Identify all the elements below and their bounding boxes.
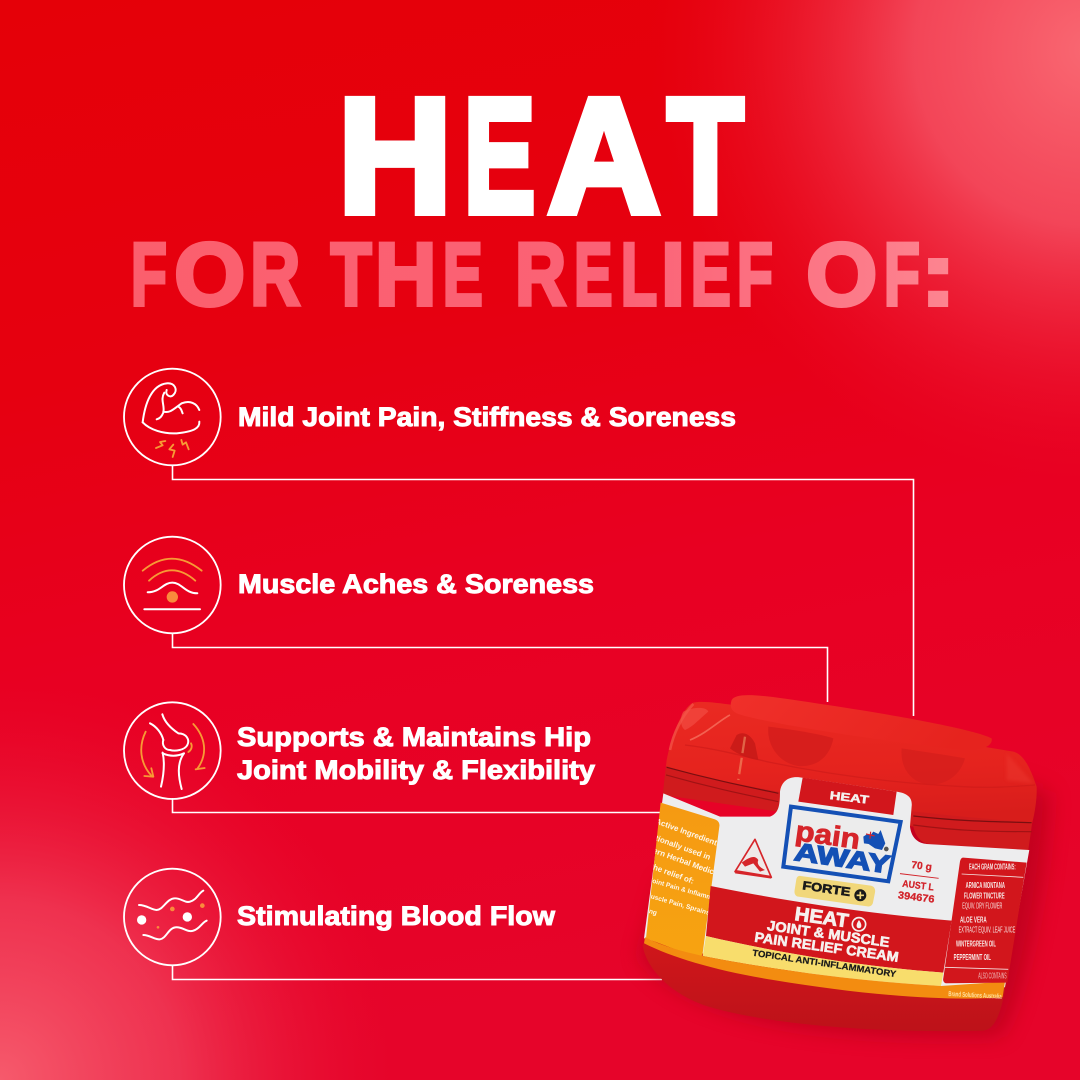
orange side panel: ing (646, 908, 658, 917)
subtitle: for the relief of: T (331, 224, 372, 324)
weight and licence text: 70 g (911, 860, 932, 873)
icon: blood flow (124, 869, 221, 965)
subtitle: for the relief of: O (806, 224, 877, 324)
orange side panel: itionally used in (652, 833, 712, 862)
product: Pain Away jar (640, 695, 1050, 1037)
subtitle: for the relief of: H (375, 224, 436, 324)
ingredients panel: WINTERGREEN OIL (956, 939, 996, 949)
red product band: PAIN RELIEF CREAM (754, 929, 900, 965)
ingredients panel: ALSO CONTAINS (978, 970, 1007, 980)
white label (644, 777, 1029, 988)
lid top disc (731, 695, 992, 750)
red product band: JOINT & MUSCLE (766, 917, 891, 950)
jar lid (666, 702, 1037, 823)
lid ring line (667, 767, 1032, 823)
title: HEAT: A (548, 64, 660, 247)
subtitle: for the relief of: L (621, 224, 657, 324)
title: HEAT: E (464, 64, 535, 247)
connector lines (172, 465, 914, 980)
under-lid ring (663, 765, 1033, 850)
subtitle: for the relief of: R (515, 224, 566, 324)
orange lower band: Brand Solutions Australia (948, 991, 1002, 1001)
Forte badge (794, 876, 875, 906)
kangaroo triangle mark (735, 839, 771, 879)
weight and licence text: AUST L (902, 879, 934, 893)
Pain Away logo: pain (793, 815, 862, 855)
Forte badge: FORTE (802, 878, 851, 899)
orange lower band (644, 937, 1005, 1001)
label: hip joint mobility: Joint Mobility & Flexibility (237, 755, 595, 785)
label: joint pain: Mild Joint Pain, Stiffness & Soreness (238, 402, 736, 432)
red product band (706, 886, 952, 973)
orange side panel: Joint Pain & Inflammation (648, 877, 728, 906)
jar shadow (640, 780, 1050, 1037)
subtitle: for the relief of: O (174, 224, 245, 324)
title: HEAT: H (338, 64, 452, 247)
ingredients panel: ALOE VERA (960, 915, 987, 925)
icon: heat waves (124, 537, 221, 633)
ingredients panel: FLOWER TINCTURE (964, 891, 1005, 901)
orange side panel: the relief of: (649, 862, 695, 886)
lid dimples (730, 727, 965, 784)
subtitle: for the relief of: I (661, 224, 685, 324)
ingredients panel: PEPPERMINT OIL (954, 952, 991, 962)
HEAT tab (798, 778, 897, 815)
yellow anti-inflammatory band (703, 936, 943, 986)
Pain Away logo (783, 807, 901, 881)
ingredients panel: EACH GRAM CONTAINS: (969, 861, 1016, 871)
lid shoulder step and highlights (670, 704, 1035, 787)
subtitle: for the relief of: E (574, 224, 612, 324)
ingredients panel: ARNICA MONTANA (966, 880, 1005, 890)
orange side panel: tern Herbal Medicine (649, 845, 727, 881)
icon: hip joint (124, 702, 221, 799)
ingredients panel (943, 858, 1027, 983)
red product band: HEAT (793, 904, 850, 932)
subtitle: for the relief of: E (443, 224, 483, 324)
HEAT tab: HEAT (829, 790, 870, 807)
orange side panel (646, 802, 720, 956)
label: blood flow: Stimulating Blood Flow (237, 901, 556, 931)
subtitle: for the relief of: E (691, 224, 731, 324)
label: hip joint mobility: Supports & Maintains Hip (237, 722, 591, 752)
yellow anti-inflammatory band: TOPICAL ANTI-INFLAMMATORY (752, 948, 897, 979)
label: muscle aches: Muscle Aches & Soreness (238, 569, 594, 599)
icon: flexed muscle (124, 369, 221, 465)
Pain Away logo: AWAY (792, 838, 892, 879)
title: HEAT: T (667, 64, 743, 247)
subtitle: for the relief of: R (250, 224, 300, 324)
subtitle: for the relief of: : (920, 224, 956, 324)
weight and licence text (897, 860, 939, 906)
orange side panel: Active Ingredients (654, 817, 723, 849)
label: hip joint mobility (237, 722, 595, 785)
orange side panel: Muscle Pain, Sprains & Strains (644, 892, 741, 926)
ingredients panel: EXTRACT EQUIV. LEAF JUICE (959, 925, 1015, 935)
subtitle: for the relief of: F (737, 224, 773, 324)
jar base (643, 933, 1007, 1031)
ingredients panel: EQUIV. DRY FLOWER (962, 901, 1002, 911)
weight and licence text: 394676 (897, 890, 935, 906)
subtitle: for the relief of: F (884, 224, 920, 324)
subtitle: for the relief of: F (131, 224, 167, 324)
